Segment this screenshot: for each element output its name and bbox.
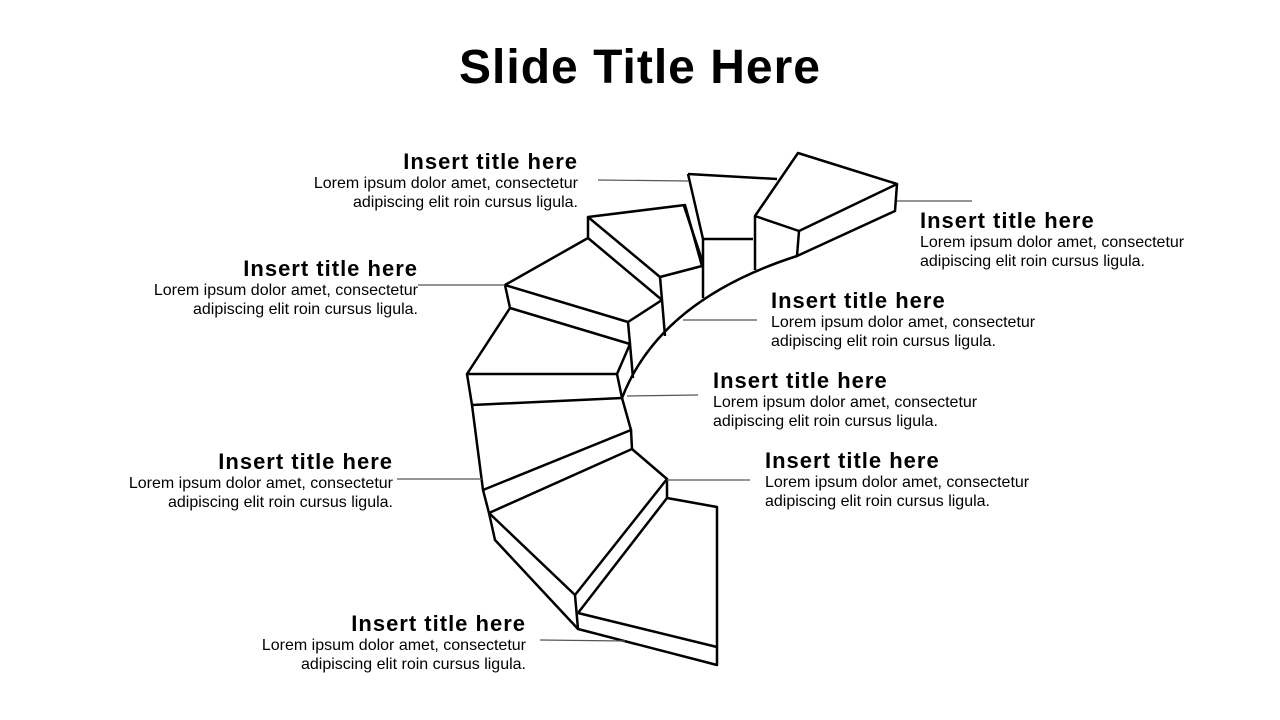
text: step left 3: Lorem ipsum dolor amet, consectetur (129, 475, 393, 492)
step 2 (684, 174, 777, 298)
text: step left 3: Insert title here (218, 449, 393, 474)
text: step left 2: Lorem ipsum dolor amet, consectetur (154, 282, 418, 299)
step 6 (472, 398, 632, 513)
text: step right 2: adipiscing elit roin cursus ligula. (771, 333, 996, 350)
step 5 (467, 308, 630, 405)
text: step right 3: Insert title here (713, 368, 888, 393)
text: step top-left: Insert title here (403, 149, 578, 174)
step 7 (489, 449, 667, 629)
text: step right 2: Lorem ipsum dolor amet, consectetur (771, 314, 1035, 331)
text: step top-right: Insert title here (920, 208, 1095, 233)
text: step bottom: Insert title here (351, 611, 526, 636)
text: step right 4: adipiscing elit roin cursus ligula. (765, 493, 990, 510)
leader lines (397, 180, 972, 641)
text: step right 3: adipiscing elit roin cursus ligula. (713, 413, 938, 430)
text: step top-left: adipiscing elit roin cursus ligula. (353, 194, 578, 211)
text: step bottom: Lorem ipsum dolor amet, consectetur (262, 637, 526, 654)
text: step right 4: Lorem ipsum dolor amet, consectetur (765, 474, 1029, 491)
text: step left 3 (129, 449, 393, 511)
step 4 (505, 238, 662, 378)
step 3 (588, 205, 702, 336)
text: step right 2: Insert title here (771, 288, 946, 313)
text: step left 2 (154, 256, 418, 318)
text: step bottom: adipiscing elit roin cursus ligula. (301, 656, 526, 673)
text: step left 2: adipiscing elit roin cursus ligula. (193, 301, 418, 318)
text: step right 4 (765, 448, 1029, 510)
text: step right 2 (771, 288, 1035, 350)
text: step top-right (920, 208, 1184, 270)
text: step top-left (314, 149, 578, 211)
text: step bottom (262, 611, 526, 673)
step 8 (578, 498, 717, 665)
text: step left 2: Insert title here (243, 256, 418, 281)
text: step top-right: Lorem ipsum dolor amet, consectetur (920, 234, 1184, 251)
step 1 top (755, 153, 897, 270)
text: step top-left: Lorem ipsum dolor amet, consectetur (314, 175, 578, 192)
text: step right 4: Insert title here (765, 448, 940, 473)
title: Slide Title Here (459, 41, 821, 94)
text: step left 3: adipiscing elit roin cursus ligula. (168, 494, 393, 511)
text: step top-right: adipiscing elit roin cursus ligula. (920, 253, 1145, 270)
text: step right 3 (713, 368, 977, 430)
text: step right 3: Lorem ipsum dolor amet, consectetur (713, 394, 977, 411)
inner arc (622, 256, 797, 398)
